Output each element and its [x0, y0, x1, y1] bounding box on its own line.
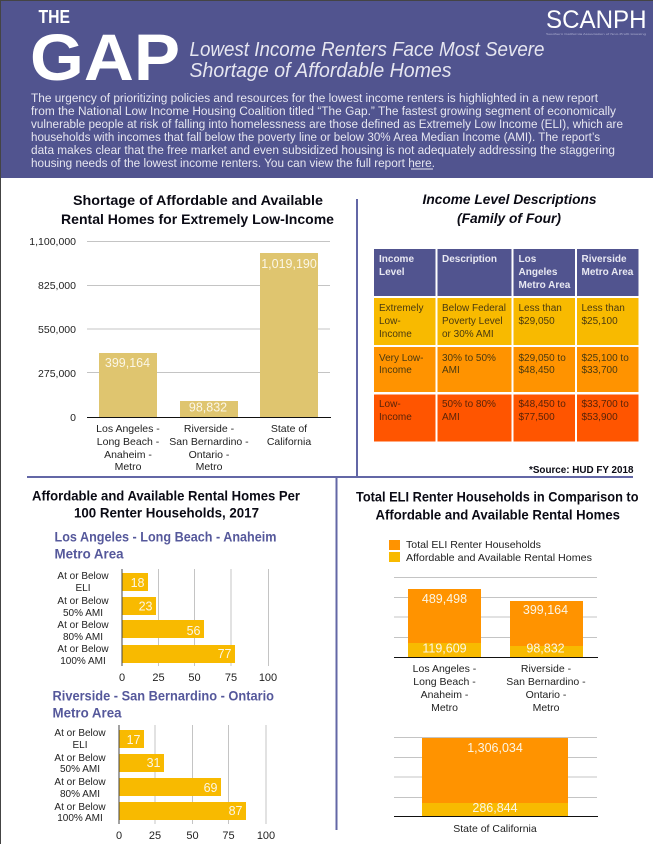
category labels: Los Angeles - [96, 423, 160, 435]
chart: Riverside horizontal bars: 50% AMI [60, 764, 100, 775]
chart: Riverside horizontal bars: 69 [204, 781, 218, 795]
category labels: Anaheim - [104, 449, 152, 461]
table header row: Riverside [582, 254, 627, 265]
category labels: Riverside - [184, 423, 235, 435]
bar values [105, 257, 317, 414]
table row: very low income: $25,100 to [582, 353, 629, 364]
heading: per 100 [32, 488, 301, 520]
table row: low income: $77,500 [518, 412, 555, 423]
table row: low income: Income [379, 412, 412, 423]
chart: Los Angeles horizontal bars: ELI [75, 583, 91, 594]
table row: extremely low income: Less than [518, 303, 562, 314]
table header row [374, 249, 638, 296]
chart: Riverside horizontal bars [54, 725, 275, 842]
intro paragraph: vulnerable people at risk of falling into homelessness are those defined as Extremely Low Income (ELI), which are [31, 117, 623, 131]
heading: shortage: Shortage of Affordable and Available [73, 192, 323, 208]
chart: Los Angeles horizontal bars: 80% AMI [63, 632, 103, 643]
title: THE: THE [38, 6, 70, 27]
chart: California stacked bar: 1,306,034 [467, 741, 523, 755]
table row: low income: Low- [379, 399, 401, 410]
chart: Los Angeles horizontal bars: At or Below [57, 644, 109, 655]
table row: extremely low income: Low- [379, 316, 401, 327]
table row: low income: $48,450 to [518, 399, 566, 410]
table row: extremely low income: or 30% AMI [442, 329, 494, 340]
table row: extremely low income: Poverty Level [442, 316, 503, 327]
chart: Los Angeles horizontal bars: 23 [139, 600, 153, 614]
table row: extremely low income: Less than [582, 303, 625, 314]
category labels: California [267, 436, 311, 448]
table row: low income: $33,700 to [582, 399, 629, 410]
subtitle [190, 38, 544, 82]
heading: shortage: Rental Homes for Extremely Low-Income [61, 211, 334, 227]
chart: Los Angeles horizontal bars: 100% AMI [60, 656, 106, 667]
heading: per 100: Affordable and Available Rental Homes Per [32, 488, 301, 504]
chart: metro stacked bars: Metro [533, 702, 560, 714]
table row: very low income: $29,050 to [518, 353, 566, 364]
panel: total ELI renter households comparison [356, 488, 638, 835]
chart: Los Angeles horizontal bars [57, 569, 277, 684]
y axis labels: 1,100,000 [29, 236, 76, 248]
chart: metro stacked bars: 399,164 [523, 603, 568, 617]
chart: Los Angeles horizontal bars: 75 [225, 672, 237, 684]
chart: metro stacked bars: Anaheim - [421, 689, 469, 701]
table header row: Income [379, 254, 414, 265]
chart: Riverside horizontal bars: At or Below [54, 802, 106, 813]
intro paragraph: from the National Low Income Housing Coalition titled “The Gap.” The fastest growing segment of economically [31, 104, 617, 118]
chart: metro stacked bars: Long Beach - [413, 676, 476, 688]
chart: California stacked bar: 286,844 [472, 801, 518, 815]
bar: Riverside [180, 401, 238, 418]
chart: Riverside horizontal bars: 31 [147, 756, 161, 770]
chart: Riverside horizontal bars: At or Below [54, 753, 106, 764]
table row: very low income [374, 347, 638, 392]
subheading: Riverside: Metro Area [52, 706, 122, 720]
legend: Affordable and Available Rental Homes [406, 552, 592, 564]
chart: Riverside horizontal bars: 100% AMI [57, 813, 103, 824]
subheading: Los Angeles: Metro Area [54, 546, 124, 562]
chart: metro stacked bars [394, 578, 598, 714]
y axis labels: 550,000 [38, 324, 76, 336]
chart: Los Angeles horizontal bars: 18 [131, 576, 145, 590]
subheading: Los Angeles [54, 530, 276, 562]
chart: Los Angeles horizontal bars: At or Below [57, 571, 109, 582]
chart: Riverside horizontal bars: 80% AMI [60, 789, 100, 800]
table row: low income: AMI [442, 412, 460, 423]
chart: Riverside horizontal bars: ELI [72, 740, 88, 751]
chart: Riverside horizontal bars: 75 [222, 830, 235, 842]
intro paragraph [31, 91, 623, 170]
subheading: Riverside: Riverside - San Bernardino - Ontario [52, 688, 274, 704]
bar: California [260, 253, 318, 418]
chart: Los Angeles horizontal bars: At or Below [57, 620, 109, 631]
chart: Riverside horizontal bars: At or Below [54, 777, 106, 788]
table row: very low income: Very Low- [379, 353, 423, 364]
table row: very low income: AMI [442, 365, 460, 376]
heading: shortage [61, 192, 334, 227]
chart: Los Angeles horizontal bars: 77 [218, 647, 232, 661]
legend: Total ELI Renter Households [406, 539, 541, 551]
table row: very low income: Income [379, 365, 412, 376]
table header row: Description [442, 254, 497, 265]
table row: very low income: $33,700 [582, 365, 618, 376]
chart: Riverside horizontal bars: 100 [257, 830, 275, 842]
bar values: 98,832 [189, 400, 227, 414]
category labels: Metro [196, 461, 223, 473]
panel: homes per 100 renter households [32, 488, 301, 842]
category labels: Metro [115, 461, 142, 473]
subtitle: Lowest Income Renters Face Most Severe [190, 38, 544, 61]
category labels: San Bernardino - [169, 436, 249, 448]
table row: extremely low income: Extremely [379, 303, 423, 314]
header banner [0, 0, 653, 178]
table row: extremely low income: $25,100 [582, 316, 618, 327]
chart: Riverside horizontal bars: 17 [127, 733, 141, 747]
chart: Los Angeles horizontal bars: 50 [188, 672, 201, 684]
chart: Riverside horizontal bars: 87 [229, 804, 243, 818]
panel: income level table [374, 191, 638, 476]
table header row: Angeles [518, 267, 558, 278]
chart: Riverside horizontal bars: At or Below [54, 728, 106, 739]
chart: Los Angeles horizontal bars: 25 [152, 672, 165, 684]
heading: income levels: Income Level Descriptions [422, 191, 597, 207]
bar: Los Angeles [99, 353, 157, 418]
y axis labels: 0 [70, 412, 76, 424]
chart: Los Angeles horizontal bars: 0 [119, 672, 125, 684]
intro paragraph: households with incomes that fall below the poverty line or below 30% Area Median Income (AMI). The report’s [31, 130, 600, 144]
chart: Riverside horizontal bars: 50 [186, 830, 199, 842]
table row: very low income: $48,450 [518, 365, 555, 376]
table header row: Metro Area [582, 267, 634, 278]
category labels: Long Beach - [97, 436, 160, 448]
chart: metro stacked bars: 98,832 [526, 642, 565, 656]
bar values: 399,164 [105, 356, 150, 370]
intro paragraph: data makes clear that the free market and even subsidized housing is not adequately addressing the staggering [31, 143, 615, 157]
heading: per 100: 100 Renter Households, 2017 [74, 504, 259, 520]
source note: *Source: HUD FY 2018 [529, 465, 634, 476]
chart: California stacked bar [394, 738, 598, 835]
chart: Los Angeles horizontal bars: 100 [259, 672, 277, 684]
y axis labels: 275,000 [38, 368, 76, 380]
intro paragraph: housing needs of the lowest income renters. You can view the full report here. [31, 156, 435, 170]
chart: Los Angeles horizontal bars: 56 [187, 624, 201, 638]
table row: low income: $53,900 [582, 412, 618, 423]
table row: low income [374, 394, 638, 442]
chart: metro stacked bars: 119,609 [422, 642, 467, 656]
table row: extremely low income [374, 298, 638, 345]
subheading: Los Angeles: Los Angeles - Long Beach - Anaheim [54, 530, 276, 544]
table row: extremely low income: $29,050 [518, 316, 555, 327]
subtitle: Shortage of Affordable Homes [190, 59, 452, 82]
heading: total ELI: Affordable and Available Rental Homes [376, 506, 620, 522]
chart: metro stacked bars: San Bernardino - [506, 676, 586, 688]
table header row: Level [379, 267, 405, 278]
chart: California stacked bar: State of California [453, 823, 537, 835]
chart: metro stacked bars: Metro [431, 702, 458, 714]
table row: extremely low income: Below Federal [442, 303, 506, 314]
subheading: Riverside [52, 688, 274, 720]
chart: metro stacked bars: 489,498 [422, 592, 467, 606]
bar values: 1,019,190 [261, 257, 317, 271]
category labels [96, 423, 311, 473]
category labels: State of [271, 423, 307, 435]
heading: income levels [422, 191, 597, 226]
heading: income levels: (Family of Four) [457, 210, 561, 226]
table header row: Los [518, 254, 537, 265]
table row: low income: 50% to 80% [442, 399, 496, 410]
legend [389, 539, 592, 564]
table header row: Metro Area [518, 280, 571, 291]
logo: SCANPH: SCANPH [546, 6, 646, 34]
category labels: Ontario - [189, 449, 230, 461]
intro paragraph: The urgency of prioritizing policies and resources for the lowest income renters is highlighted in a new report [31, 91, 599, 105]
y axis labels [29, 236, 76, 424]
chart: Los Angeles horizontal bars: 50% AMI [63, 608, 103, 619]
chart: Riverside horizontal bars: 25 [149, 830, 161, 842]
chart: metro stacked bars: Los Angeles - [413, 663, 477, 675]
table row: extremely low income: Income [379, 329, 412, 340]
chart: metro stacked bars: Riverside - [521, 663, 572, 675]
logo: SCANPH: Southern California Association of Non-Profit Housing [546, 32, 646, 36]
table row: very low income: 30% to 50% [442, 353, 496, 364]
y axis labels: 825,000 [38, 280, 76, 292]
heading: total ELI [356, 488, 638, 522]
panel: shortage bar chart [29, 192, 334, 473]
chart: metro stacked bars: Ontario - [526, 689, 567, 701]
title: GAP: GAP [30, 20, 180, 94]
chart: Riverside horizontal bars: 0 [116, 830, 122, 842]
chart: Los Angeles horizontal bars: At or Below [57, 596, 109, 607]
